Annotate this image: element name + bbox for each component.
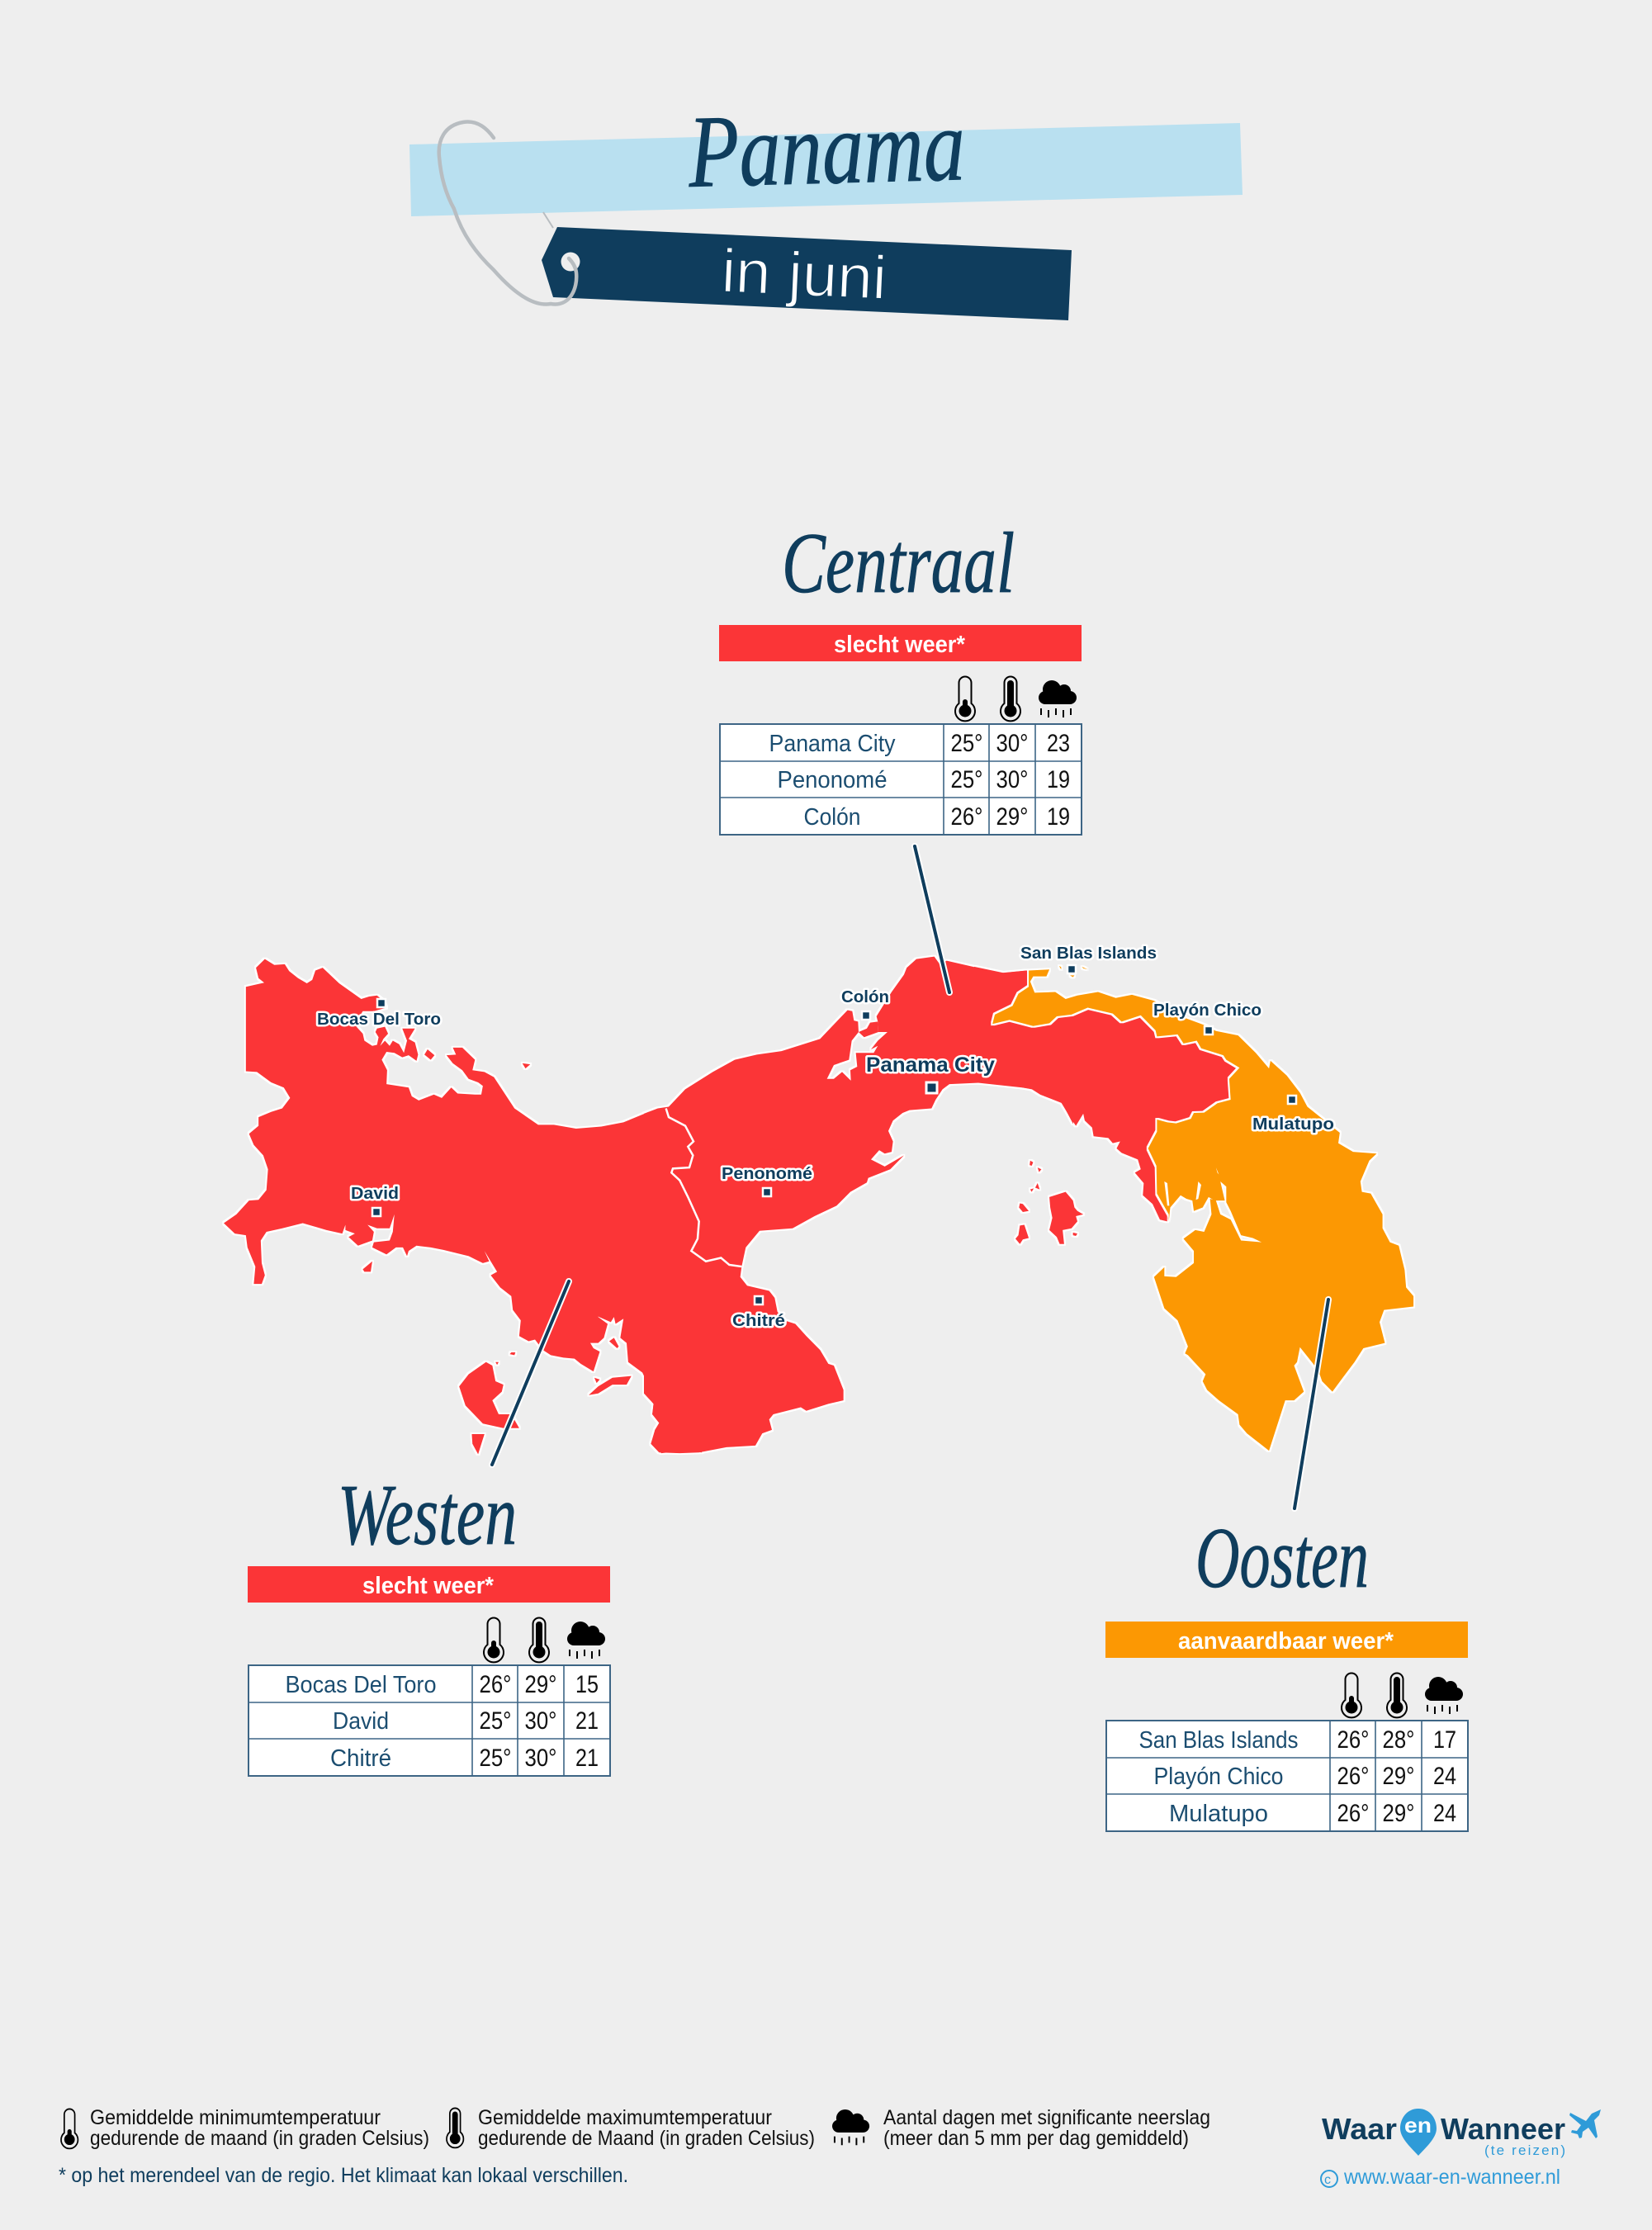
city: Penonomé: Penonomé xyxy=(722,1165,812,1183)
weather table: 21 xyxy=(575,1745,599,1772)
weather table: 19 xyxy=(1047,803,1070,831)
weather table xyxy=(249,1665,610,1776)
weather table: Chitré xyxy=(330,1745,391,1772)
legend text: rain: Aantal dagen met significante neerslag xyxy=(883,2106,1210,2129)
copyright and url: c xyxy=(1324,2173,1331,2187)
weather badge xyxy=(719,625,1082,661)
icon: maximum temperature xyxy=(1001,677,1020,721)
city: Playón Chico: Playón Chico xyxy=(1153,1001,1261,1020)
weather table: Penonomé xyxy=(778,767,887,793)
logo text: Waar: Waar xyxy=(1322,2112,1397,2146)
city: David: David xyxy=(351,1185,399,1203)
leader line: Westen xyxy=(492,1281,569,1465)
icon: rain xyxy=(1039,680,1077,717)
icon: legend rain xyxy=(832,2109,869,2145)
weather table: 29° xyxy=(1382,1763,1415,1790)
weather table: Bocas Del Toro xyxy=(286,1672,436,1698)
weather badge: slecht weer* xyxy=(362,1573,495,1599)
icon: legend minimum temperature xyxy=(61,2109,78,2148)
weather table: 15 xyxy=(575,1671,599,1698)
city: Colón xyxy=(841,988,889,1020)
legend text: maximum temperature xyxy=(478,2106,815,2150)
copyright and url: www.waar-en-wanneer.nl xyxy=(1343,2166,1560,2189)
panel: Centraal xyxy=(719,514,1082,835)
heading: Panama: Panama xyxy=(686,88,967,210)
weather table: 26° xyxy=(951,803,982,831)
city: Mulatupo: Mulatupo xyxy=(1252,1115,1334,1134)
ring wire xyxy=(439,122,576,305)
weather table: San Blas Islands xyxy=(1139,1727,1298,1754)
city: Panama City xyxy=(866,1053,995,1093)
weather table: 17 xyxy=(1433,1726,1456,1754)
icon: minimum temperature xyxy=(484,1618,504,1662)
city: Mulatupo xyxy=(1252,1096,1334,1134)
tag string xyxy=(543,212,553,228)
weather table: Mulatupo xyxy=(1169,1801,1268,1827)
weather table xyxy=(1106,1721,1468,1831)
icon: maximum temperature xyxy=(529,1618,549,1662)
map region: red areas xyxy=(224,957,1239,1454)
title band xyxy=(409,123,1243,216)
city: Panama City: Panama City xyxy=(866,1053,995,1077)
weather badge: aanvaardbaar weer* xyxy=(1178,1628,1394,1655)
weather badge xyxy=(248,1566,610,1603)
footnote: * op het merendeel van de regio. Het klimaat kan lokaal verschillen. xyxy=(59,2164,628,2187)
weather table: 29° xyxy=(525,1671,556,1698)
weather table xyxy=(720,724,1082,835)
map of Panama xyxy=(224,846,1413,1508)
legend text: maximum temperature: gedurende de Maand (in graden Celsius) xyxy=(478,2127,815,2150)
subheading: in juni: in juni xyxy=(720,236,888,312)
legend text: maximum temperature: Gemiddelde maximumtemperatuur xyxy=(478,2106,772,2129)
tag hole xyxy=(561,253,580,271)
weather table: 21 xyxy=(575,1707,599,1735)
city: Bocas Del Toro xyxy=(317,999,441,1029)
map region: orange area xyxy=(992,966,1413,1451)
map border: west and central xyxy=(666,1109,741,1267)
legend text: rain: (meer dan 5 mm per dag gemiddeld) xyxy=(883,2127,1189,2150)
heading: Westen: Westen xyxy=(338,1466,517,1563)
logo text: Wanneer: Wanneer xyxy=(1441,2112,1565,2146)
icon: location pin xyxy=(1400,2109,1437,2156)
icon: legend maximum temperature xyxy=(447,2108,463,2147)
legend xyxy=(59,2106,1210,2187)
icon: airplane xyxy=(1569,2109,1601,2138)
city: Chitré: Chitré xyxy=(732,1312,785,1330)
icon: rain xyxy=(567,1622,605,1659)
weather table: 26° xyxy=(1337,1800,1369,1827)
weather table: 25° xyxy=(951,730,982,757)
leader line: Oosten xyxy=(1295,1300,1328,1508)
weather table: 30° xyxy=(525,1707,556,1735)
map inlets xyxy=(1164,1167,1219,1205)
weather table: Playón Chico xyxy=(1154,1764,1283,1790)
city: Playón Chico xyxy=(1153,1001,1261,1035)
weather badge: slecht weer* xyxy=(834,632,966,658)
weather table: 30° xyxy=(996,730,1029,757)
heading: Centraal: Centraal xyxy=(782,514,1015,611)
weather table: 26° xyxy=(1337,1763,1369,1790)
logo tagline: (te reizen) xyxy=(1484,2142,1565,2158)
icon: maximum temperature xyxy=(1387,1673,1407,1717)
heading: Oosten: Oosten xyxy=(1195,1509,1369,1606)
logo: Waar en Wanneer xyxy=(1321,2109,1601,2189)
weather badge xyxy=(1105,1622,1468,1658)
weather table: 25° xyxy=(479,1707,512,1735)
weather table: 29° xyxy=(1382,1800,1415,1827)
weather table: 19 xyxy=(1047,766,1070,793)
weather table: 25° xyxy=(951,766,982,793)
legend text: rain xyxy=(883,2106,1210,2150)
icon: minimum temperature xyxy=(955,677,975,721)
tag: in juni xyxy=(542,227,1072,320)
legend text: minimum temperature: gedurende de maand (in graden Celsius) xyxy=(90,2127,429,2150)
city: Chitré xyxy=(732,1296,785,1330)
weather table: 23 xyxy=(1047,730,1070,757)
icon: rain xyxy=(1425,1677,1463,1714)
city: Penonomé xyxy=(722,1165,812,1196)
panel: Westen xyxy=(248,1466,610,1776)
weather table: 28° xyxy=(1382,1726,1415,1754)
legend text: minimum temperature: Gemiddelde minimumtemperatuur xyxy=(90,2106,381,2129)
icon: minimum temperature xyxy=(1342,1673,1361,1717)
panel: Oosten xyxy=(1105,1509,1468,1831)
logo text: en: en xyxy=(1404,2113,1432,2138)
weather table: 30° xyxy=(996,766,1029,793)
city: San Blas Islands xyxy=(1020,945,1157,973)
legend text: minimum temperature xyxy=(90,2106,429,2150)
weather table: Colón xyxy=(804,804,860,831)
weather table: Panama City xyxy=(769,731,896,757)
city: Bocas Del Toro: Bocas Del Toro xyxy=(317,1011,441,1029)
weather table: 29° xyxy=(996,803,1029,831)
weather table: 30° xyxy=(525,1745,556,1772)
leader line: Centraal xyxy=(915,846,949,992)
city: David xyxy=(351,1185,399,1216)
city: Colón: Colón xyxy=(841,988,889,1006)
weather table: 26° xyxy=(479,1671,512,1698)
weather table: David xyxy=(333,1708,389,1735)
weather table: 24 xyxy=(1433,1763,1456,1790)
weather table: 24 xyxy=(1433,1800,1456,1827)
weather table: 25° xyxy=(479,1745,512,1772)
title: Panama in juni xyxy=(409,88,1243,320)
weather table: 26° xyxy=(1337,1726,1369,1754)
city: San Blas Islands: San Blas Islands xyxy=(1020,945,1157,963)
